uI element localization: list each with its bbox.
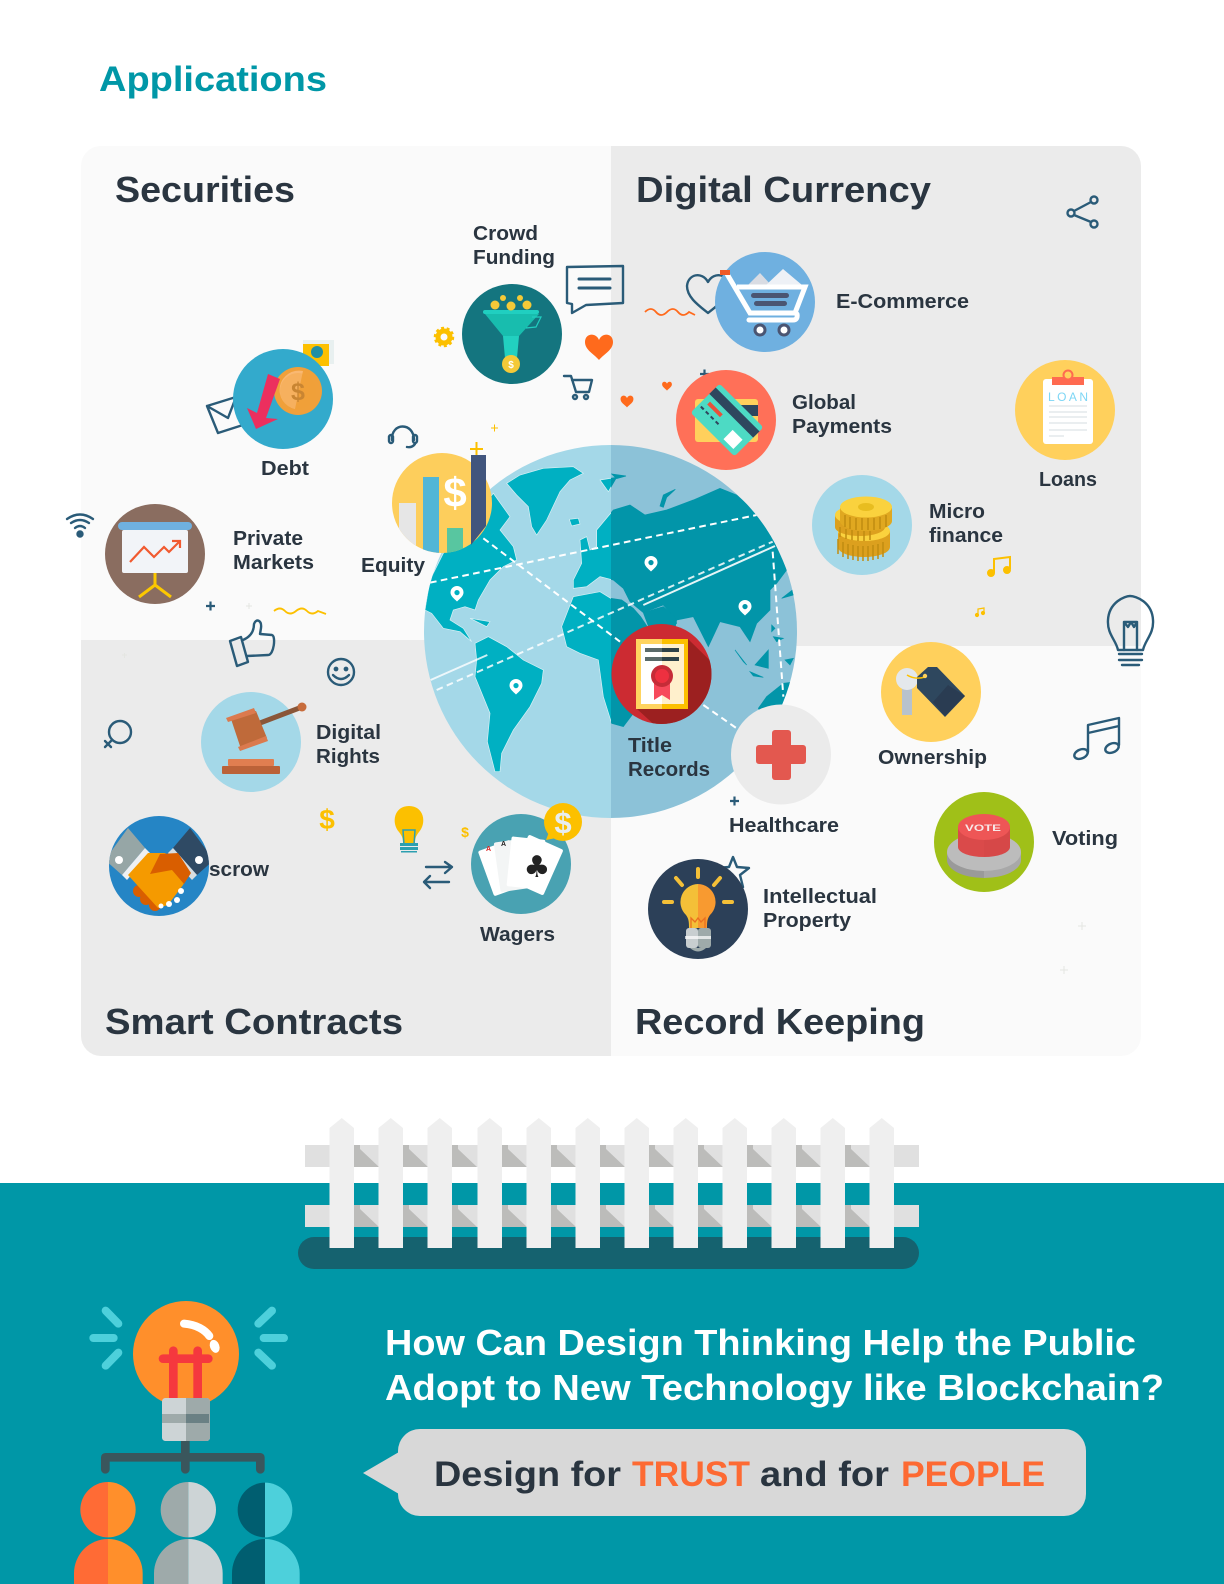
label: Wagers: Wagers	[480, 924, 555, 946]
person grey	[154, 1482, 223, 1584]
label: Crowd Funding: Funding	[473, 247, 555, 269]
callout: design for trust and people: Design for	[434, 1455, 621, 1494]
icon: private markets presentation	[105, 504, 205, 604]
icon: wagers cards: A	[486, 846, 491, 853]
person teal	[232, 1483, 300, 1584]
label: Title Records: Title	[628, 735, 672, 757]
icon: intellectual property bulb	[648, 859, 748, 959]
icon: crowd funding: $	[508, 360, 514, 371]
ocean left	[420, 440, 611, 825]
icon: wagers cards: A	[501, 841, 506, 848]
icon: equity chart	[392, 442, 492, 555]
icon: light bulb	[395, 806, 423, 852]
icon: healthcare cross	[731, 704, 831, 804]
label: Equity: Equity	[361, 555, 426, 577]
teal footer band	[0, 1183, 1224, 1584]
label: Title Records	[628, 735, 710, 781]
icon: outline music notes	[1073, 718, 1120, 761]
light rays	[93, 1311, 284, 1366]
label: Crowd Funding	[473, 223, 555, 269]
faint sparkle marks	[122, 603, 1086, 974]
icon: wagers cards: ♣	[524, 850, 550, 885]
illustration: light bulb connected to people	[74, 1301, 300, 1584]
quadrant: record keeping	[611, 646, 1141, 1056]
icon: speech bubble	[567, 266, 623, 313]
label: Private Markets: Markets	[233, 552, 314, 574]
label: Digital Rights	[316, 722, 381, 768]
icon: wagers cards	[471, 803, 582, 914]
question heading: How Can Design Thinking Help the Public	[385, 1322, 1136, 1363]
callout: design for trust and people	[363, 1429, 1086, 1516]
label: Micro finance: Micro	[929, 501, 985, 523]
icon: female symbol	[105, 721, 131, 747]
label: Intellectual Property: Property	[763, 910, 852, 932]
label: Intellectual Property: Intellectual	[763, 886, 877, 908]
label: Micro finance: finance	[929, 525, 1003, 547]
icon: yellow dollar: $	[319, 804, 335, 835]
icon: outline light bulb	[1108, 596, 1153, 665]
icon: voting button: VOTE	[965, 823, 1001, 834]
map pins	[450, 556, 752, 694]
label: Digital Rights: Digital	[316, 722, 381, 744]
icon: thumbs up	[230, 621, 274, 666]
icon: micro finance coins	[812, 475, 912, 575]
icon: small yellow dollar: $	[461, 824, 469, 840]
icon: small cart	[564, 376, 592, 399]
callout: design for trust and people: PEOPLE	[901, 1455, 1045, 1494]
label: Global Payments: Payments	[792, 416, 892, 438]
icon: ownership key and tag	[881, 642, 981, 742]
callout: design for trust and people: and for	[760, 1455, 889, 1494]
heading: Digital Currency: Digital Currency	[636, 169, 931, 210]
icon: wagers cards: $	[554, 805, 572, 840]
label: Global Payments: Global	[792, 392, 856, 414]
icon: small heart right	[662, 382, 672, 391]
bulb	[133, 1301, 239, 1441]
label: Debt: Debt	[261, 458, 309, 480]
heading: Applications: Applications	[99, 60, 327, 99]
label: Healthcare: Healthcare	[729, 815, 839, 837]
icon: small yellow plus	[491, 424, 498, 432]
label: Global Payments	[792, 392, 892, 438]
icon: loans clipboard: LOAN	[1048, 390, 1088, 404]
land right half	[611, 474, 794, 727]
decoration: yellow wave	[274, 608, 326, 614]
heading: Record Keeping: Record Keeping	[635, 1001, 925, 1042]
icon: star outline	[717, 857, 749, 887]
icon: gear	[435, 328, 453, 346]
label: Private Markets: Private	[233, 528, 303, 550]
icon: large heart	[585, 335, 613, 360]
question heading	[385, 1322, 1164, 1408]
label: Voting: Voting	[1052, 828, 1118, 850]
icon: navy plus	[700, 370, 709, 378]
icon: yellow music note	[988, 557, 1010, 576]
icon: voting button	[934, 792, 1034, 892]
icon: loans clipboard	[1015, 360, 1115, 460]
label: Loans: Loans	[1039, 469, 1097, 491]
icon: crowd funding	[462, 284, 562, 384]
icon: tiny yellow music note	[976, 608, 984, 616]
connector tree	[105, 1437, 260, 1469]
decoration: orange wave	[645, 309, 695, 315]
quadrant: securities	[81, 146, 611, 640]
quadrant: digital currency	[611, 146, 1141, 646]
person orange	[74, 1482, 143, 1584]
question heading: Adopt to New Technology like Blockchain?	[385, 1367, 1164, 1408]
network routes	[430, 515, 783, 728]
land left half	[425, 466, 611, 772]
icon: navy plus healthcare	[730, 796, 739, 806]
fence illustration	[298, 1118, 919, 1269]
icon: smiley	[328, 659, 354, 685]
icon: digital rights gavel	[201, 692, 306, 792]
heading: Smart Contracts: Smart Contracts	[105, 1001, 403, 1042]
ocean right	[611, 440, 802, 825]
label: Intellectual Property	[763, 886, 877, 932]
icon: e-commerce cart	[715, 252, 815, 352]
globe with network routes	[420, 440, 802, 825]
fence base	[298, 1237, 919, 1269]
icon: equity chart: $	[443, 469, 467, 516]
icon: navy plus left	[206, 602, 215, 610]
icon: title records certificate	[612, 624, 712, 724]
icon: small heart left	[621, 396, 633, 407]
icon: exchange arrows	[424, 862, 452, 888]
icon: debt: $	[291, 378, 305, 406]
icon: wifi	[67, 514, 93, 536]
icon: debt	[207, 340, 334, 449]
label: Micro finance	[929, 501, 1003, 547]
icon: heart outline	[687, 275, 729, 313]
icon: escrow handshake	[105, 816, 214, 916]
label: E-Commerce: E-Commerce	[836, 291, 969, 313]
panel: four application quadrants	[81, 146, 1141, 1056]
label: Private Markets	[233, 528, 314, 574]
label: Digital Rights: Rights	[316, 746, 380, 768]
icon: share	[1068, 196, 1098, 228]
heading: Securities: Securities	[115, 169, 295, 210]
fence pickets	[330, 1118, 894, 1248]
icon: global payments	[676, 370, 776, 470]
label: Ownership: Ownership	[878, 747, 987, 769]
fence rails	[305, 1145, 919, 1227]
label: Escrow: scrow	[209, 859, 269, 881]
label: Title Records: Records	[628, 759, 710, 781]
icon: headset	[389, 426, 417, 447]
quadrant: smart contracts	[81, 640, 611, 1056]
callout: design for trust and people: TRUST	[632, 1455, 750, 1494]
label: Crowd Funding: Crowd	[473, 223, 538, 245]
